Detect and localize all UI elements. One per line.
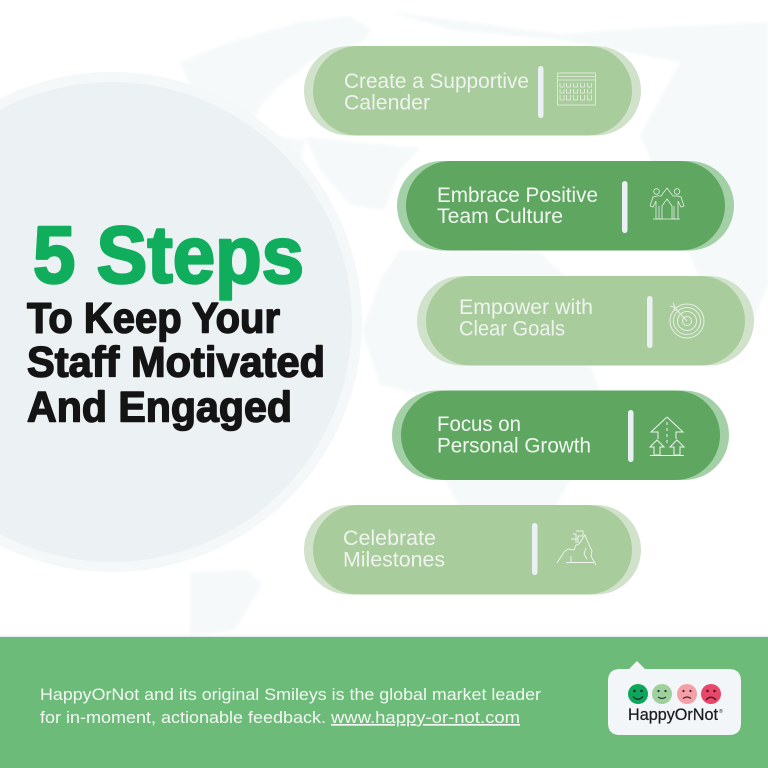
step 2 text: Team Culture <box>437 204 563 228</box>
step 2 text: Embrace Positive <box>437 183 598 207</box>
footer text: HappyOrNot and its original Smileys is the global market leader <box>40 685 541 704</box>
icon: mountain with flag <box>557 531 596 565</box>
smiley: very happy <box>628 684 648 704</box>
title line: 5 Steps: 5 Steps <box>33 210 304 300</box>
footer text: for in-moment, actionable feedback. <box>40 708 326 727</box>
step 5 text: Milestones <box>343 548 445 572</box>
step 1 text: Calender <box>344 90 430 114</box>
step 5 text: Celebrate <box>343 526 436 550</box>
footer text: www.happy-or-not.com <box>330 708 520 727</box>
title <box>27 210 325 432</box>
smiley: very unhappy <box>701 684 721 704</box>
subtitle lines: Staff Motivated <box>27 338 325 386</box>
icon: calendar <box>558 73 596 105</box>
panel: step 4 Focus on Personal Growth <box>392 390 729 480</box>
icon: team high five <box>650 188 684 219</box>
background world map <box>180 12 768 636</box>
subtitle lines: To Keep Your <box>27 294 280 342</box>
panel: step 5 Celebrate Milestones <box>304 505 641 594</box>
step 3 text: Clear Goals <box>459 316 565 340</box>
smiley: unhappy <box>677 684 697 704</box>
step 4 text: Personal Growth <box>437 434 591 458</box>
smiley: happy <box>652 684 672 704</box>
panel: step 1 Create a Supportive Calender <box>304 46 641 136</box>
logo: HappyOrNot speech bubble <box>608 661 741 735</box>
icon: target with arrow <box>670 303 704 338</box>
step 1 text: Create a Supportive <box>344 69 529 93</box>
step 4 text: Focus on <box>437 412 521 436</box>
step 3 text: Empower with <box>459 295 593 319</box>
logo wordmark: HappyOrNot <box>628 706 718 724</box>
footer band <box>0 636 768 768</box>
panel: step 3 Empower with Clear Goals <box>417 276 754 366</box>
icon: growth arrows <box>650 417 684 456</box>
subtitle lines: And Engaged <box>27 384 292 432</box>
large title circle <box>0 72 362 572</box>
subtitle lines <box>27 294 325 432</box>
panel: step 2 Embrace Positive Team Culture <box>397 161 734 250</box>
registered mark: ® <box>719 708 723 715</box>
